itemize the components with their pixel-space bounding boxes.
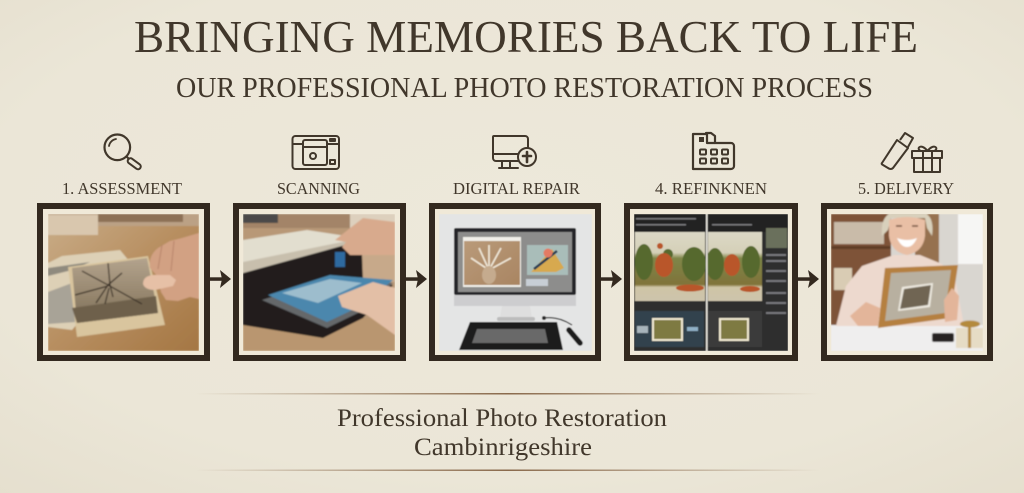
arrow 3	[601, 270, 622, 288]
footer text: Professional Photo Restoration	[337, 405, 668, 432]
label: step 2: SCANNING	[277, 179, 360, 198]
top divider	[195, 393, 820, 394]
icon: computer with plus	[493, 136, 536, 168]
title: BRINGING MEMORIES BACK TO LIFE	[134, 11, 918, 62]
step 5 frame and photo	[824, 206, 990, 358]
step 3 frame and illustration	[432, 206, 598, 358]
icon: magnifying glass	[104, 134, 138, 166]
icon: scanner	[292, 136, 339, 169]
footer text: Cambinrigeshire	[414, 434, 592, 461]
label: step 5: 5. DELIVERY	[858, 179, 954, 198]
arrow 2	[406, 270, 427, 288]
label: step 3: DIGITAL REPAIR	[453, 179, 580, 198]
bottom divider	[195, 470, 820, 471]
footer text	[337, 405, 668, 461]
icon: USB drive and gift	[882, 133, 942, 172]
label: step 4: 4. REFINKNEN	[655, 179, 767, 198]
step 2 frame and photo	[236, 206, 403, 358]
subtitle: OUR PROFESSIONAL PHOTO RESTORATION PROCESS	[176, 73, 873, 104]
arrow 1	[210, 270, 231, 288]
step 1 frame and photo	[40, 206, 207, 358]
icon: photo grid folder	[693, 133, 734, 169]
step 4 frame and editor screenshot	[627, 206, 795, 358]
label: step 1: 1. ASSESSMENT	[62, 179, 182, 198]
arrow 4	[798, 270, 819, 288]
